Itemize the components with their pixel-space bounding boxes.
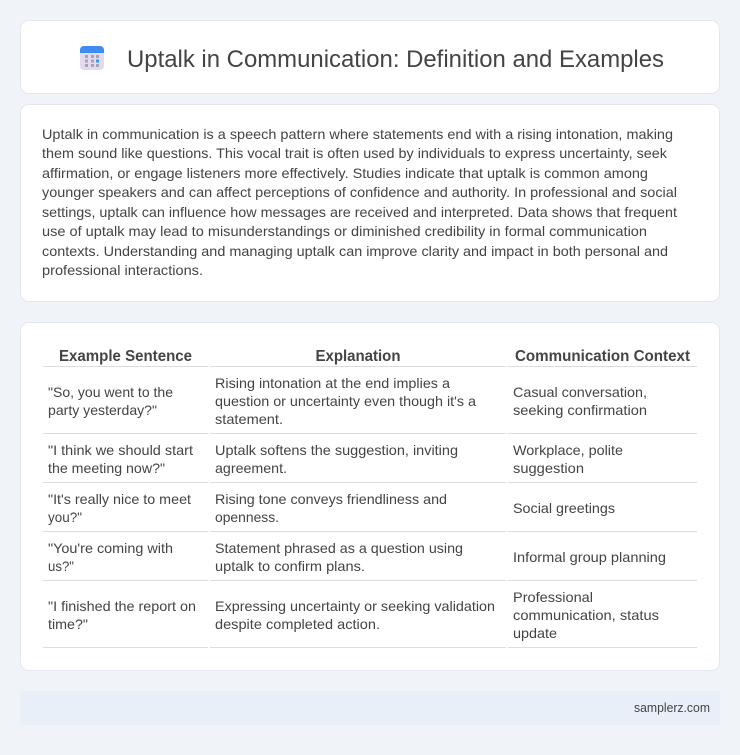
table row 5: Expressing uncertainty or seeking validation bbox=[215, 598, 495, 614]
table header: Explanation bbox=[316, 348, 400, 365]
table row 1: "So, you went to the bbox=[48, 384, 173, 400]
table row 5: "I finished the report on bbox=[48, 598, 196, 614]
table row 3: "It's really nice to meet bbox=[48, 491, 191, 507]
table row 5: update bbox=[513, 625, 557, 641]
table row 2: Uptalk softens the suggestion, inviting bbox=[215, 442, 458, 458]
table row 2: agreement. bbox=[215, 460, 287, 476]
table row 5: communication, status bbox=[513, 607, 659, 623]
table row 1: Casual conversation, bbox=[513, 384, 647, 400]
table row 2: "I think we should start bbox=[48, 442, 193, 458]
text block: introduction paragraph: them sound like questions. This vocal trait is often used by individuals to express uncertainty, seek bbox=[42, 145, 668, 161]
text block: introduction paragraph: Uptalk in communication is a speech pattern where statements end with a rising intonation, making bbox=[42, 126, 673, 142]
table row 1: statement. bbox=[215, 411, 283, 427]
table row 2: suggestion bbox=[513, 460, 584, 476]
table header bbox=[59, 348, 690, 365]
table row 4: Statement phrased as a question using bbox=[215, 540, 463, 556]
table row 3: Social greetings bbox=[513, 500, 615, 516]
title: Uptalk in Communication: Definition and Examples bbox=[127, 46, 664, 73]
panel: examples table bbox=[20, 322, 720, 670]
table row 2: the meeting now?" bbox=[48, 460, 165, 476]
panel: title card bbox=[20, 20, 720, 94]
icon: calendar bbox=[80, 46, 104, 70]
footer bar bbox=[20, 691, 720, 725]
table row 3: you?" bbox=[48, 509, 82, 525]
table row 4: Informal group planning bbox=[513, 549, 666, 565]
table row 1 bbox=[48, 375, 647, 427]
table row 1: question or uncertainty even though it's a bbox=[215, 393, 476, 409]
table row 3 bbox=[48, 491, 615, 525]
text block: introduction paragraph: professional interactions. bbox=[42, 262, 203, 278]
table row 4 bbox=[48, 540, 666, 574]
table row 5: time?" bbox=[48, 616, 88, 632]
table row 4: us?" bbox=[48, 558, 74, 574]
text block: introduction paragraph: contexts. Understanding and managing uptalk can improve clarity and impact in both personal and bbox=[42, 243, 668, 259]
footer text: samplerz.com bbox=[634, 701, 710, 715]
table row 2: Workplace, polite bbox=[513, 442, 623, 458]
text block: introduction paragraph bbox=[42, 126, 677, 278]
table row 5: despite completed action. bbox=[215, 616, 380, 632]
text block: introduction paragraph: younger speakers and can affect perceptions of confidence and authority. In professional and social bbox=[42, 184, 677, 200]
table row 5: Professional bbox=[513, 589, 593, 605]
table header: Example Sentence bbox=[59, 348, 192, 365]
table header: Communication Context bbox=[515, 348, 690, 365]
text block: introduction paragraph: affirmation, or engage listeners more effectively. Studies indicate that uptalk is common among bbox=[42, 165, 648, 181]
table row 2 bbox=[48, 442, 623, 476]
panel: introduction bbox=[20, 104, 720, 302]
table row 3: openness. bbox=[215, 509, 279, 525]
table row 1: party yesterday?" bbox=[48, 402, 157, 418]
table row 3: Rising tone conveys friendliness and bbox=[215, 491, 447, 507]
text block: introduction paragraph: settings, uptalk can influence how messages are received and interpreted. Data shows that frequent bbox=[42, 204, 677, 220]
table row 1: Rising intonation at the end implies a bbox=[215, 375, 450, 391]
table row 5 bbox=[48, 589, 659, 641]
text block: introduction paragraph: use of uptalk may lead to misunderstandings or diminished credibility in formal communication bbox=[42, 223, 647, 239]
table row 4: uptalk to confirm plans. bbox=[215, 558, 365, 574]
table row 1: seeking confirmation bbox=[513, 402, 647, 418]
table row 4: "You're coming with bbox=[48, 540, 173, 556]
